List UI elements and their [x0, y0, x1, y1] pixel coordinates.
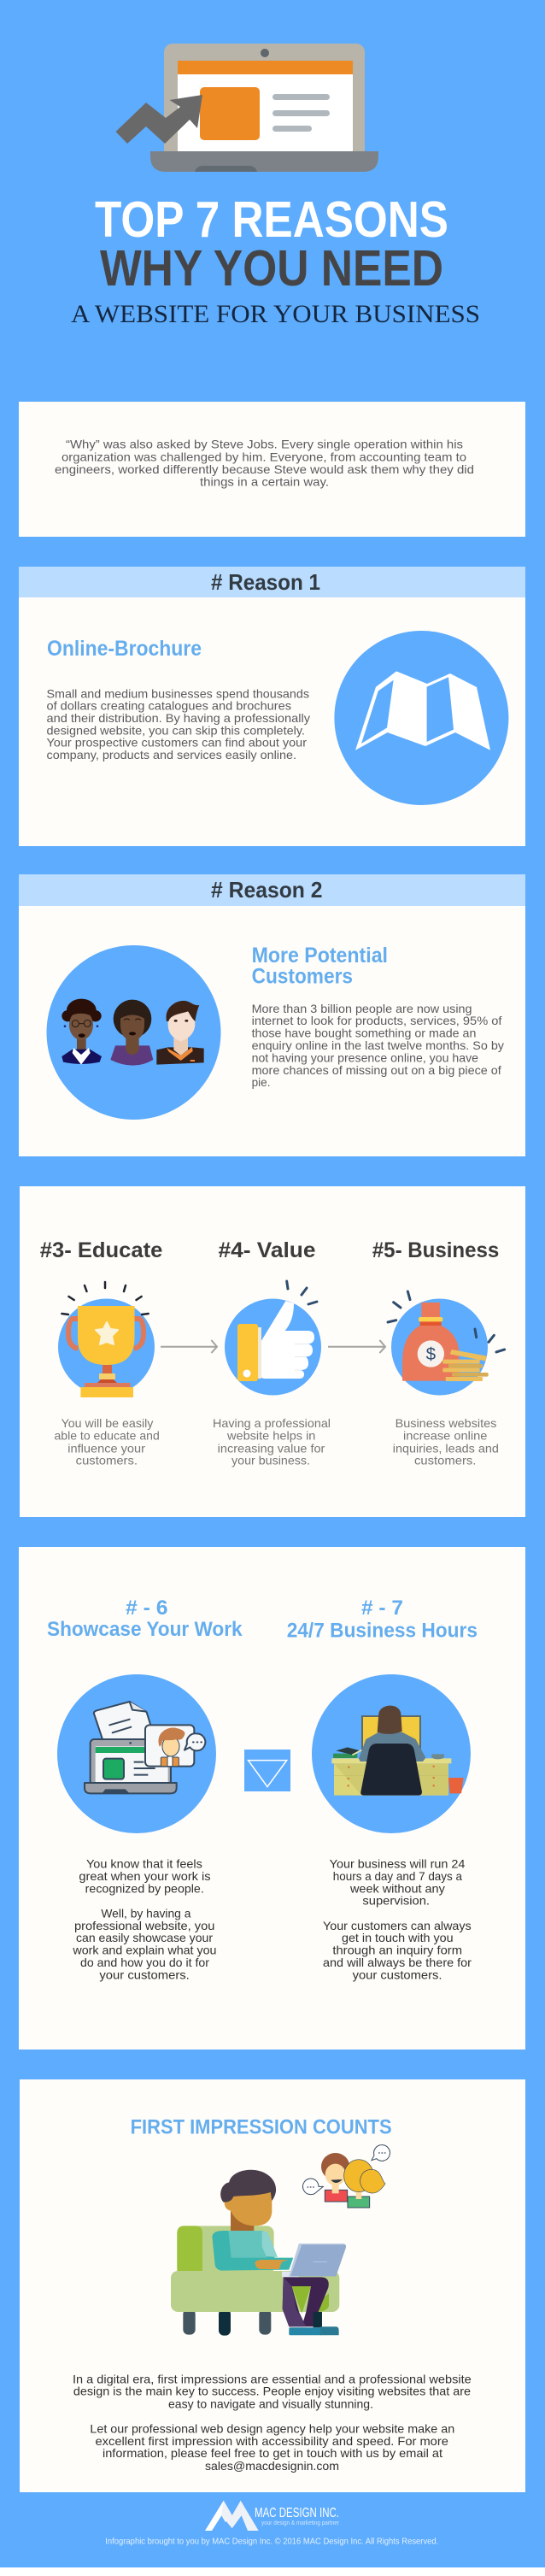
icon: laptop, document and profile — [57, 1674, 216, 1833]
panel: reason 2 — [19, 874, 525, 1156]
text: reason 6 body: your customers. — [99, 1967, 190, 1981]
heading: reason 1: # Reason 1 — [211, 569, 320, 595]
footer: logo: your design & marketing partner — [261, 2520, 340, 2526]
icon: person at desk — [312, 1674, 471, 1833]
heading: more potential customers: Customers — [252, 965, 353, 989]
text: reason 6 body: professional website, you — [74, 1919, 214, 1932]
text: more potential customers body: internet to look for products, services, 95% of — [252, 1014, 502, 1027]
text: educate body: You will be easily — [62, 1416, 153, 1430]
icon: down triangle box — [244, 1750, 290, 1791]
panel: first impression — [20, 2079, 525, 2492]
icon: trophy — [58, 1282, 155, 1397]
text: more potential customers body: pie. — [252, 1075, 270, 1089]
footer: logo — [205, 2501, 340, 2531]
icon: three people in circle — [46, 945, 220, 1120]
text: reason 7 body: your customers. — [353, 1967, 442, 1981]
heading: more potential customers: More Potential — [252, 944, 388, 967]
text: business body: increase online — [403, 1429, 488, 1443]
text: more potential customers body: more chances of missing out on a big piece of — [252, 1063, 501, 1077]
heading: reason 7: # - 7 — [361, 1597, 403, 1620]
icon: money bag and coins: $ — [426, 1344, 437, 1364]
panel: intro — [19, 402, 525, 537]
icon: laptop with growth arrow — [116, 44, 378, 172]
text: first impression body: sales@macdesignin.com — [205, 2459, 339, 2473]
title: WHY YOU NEED — [100, 239, 443, 297]
text: first impression body: Let our professional web design agency help your website make an — [90, 2421, 454, 2435]
panel: intro: things in a certain way. — [200, 475, 329, 489]
heading: reason 7 — [287, 1597, 478, 1643]
icon: folded map in circle — [334, 631, 508, 805]
title: TOP 7 REASONS — [95, 191, 448, 248]
footer: credit line: Infographic brought to you by MAC Design Inc. © 2016 MAC Design Inc. All Rights Reserved. — [105, 2537, 438, 2547]
heading: reason 6 — [47, 1597, 243, 1641]
panel: reasons 3 to 5 — [20, 1186, 525, 1517]
text: reason 7 body: and will always be there for — [323, 1956, 472, 1969]
text: educate body: influence your — [67, 1441, 145, 1455]
text: value body — [213, 1416, 331, 1467]
text: more potential customers body: More than 3 billion people are now using — [252, 1002, 472, 1015]
text: value body: Having a professional — [213, 1416, 331, 1430]
text: first impression body: excellent first impression with accessibility and speed. For more — [96, 2434, 448, 2448]
text: reason 7 body: Your customers can always — [323, 1919, 472, 1932]
text: reason 6 body: recognized by people. — [85, 1881, 204, 1895]
heading: reason 2: # Reason 2 — [211, 877, 323, 903]
text: reason 6 body: do and how you do it for — [80, 1956, 209, 1969]
title: A WEBSITE FOR YOUR BUSINESS — [71, 300, 480, 328]
text: reason 6 body: can easily showcase your — [76, 1931, 213, 1944]
heading: reason 7: 24/7 Business Hours — [287, 1619, 478, 1643]
text: business body — [393, 1416, 499, 1467]
text: educate body: customers. — [76, 1454, 138, 1467]
icon: two people talking — [303, 2145, 390, 2208]
text: reason 6 body: work and explain what you — [72, 1944, 217, 1957]
text: first impression body — [73, 2373, 472, 2473]
text: value body: website helps in — [226, 1429, 315, 1443]
text: more potential customers body — [252, 1002, 504, 1089]
text: reason 7 body: get in touch with you — [342, 1931, 454, 1944]
panel: intro: engineers, worked differently because Steve would ask them why they did — [55, 462, 474, 476]
footer: logo: MAC DESIGN INC. — [255, 2506, 339, 2520]
text: reason 7 body: week without any — [349, 1881, 445, 1895]
text: business body: Business websites — [396, 1416, 496, 1430]
panel: reason 1 — [19, 567, 525, 846]
text: business body: customers. — [414, 1454, 476, 1467]
text: more potential customers body: enquiry online in the last twelve months. So by — [252, 1038, 504, 1052]
text: online brochure body: and their distribution. By having a professionally — [46, 711, 310, 725]
text: online brochure body: of dollars creating catalogues and brochures — [46, 699, 291, 713]
text: educate body: able to educate and — [55, 1429, 160, 1443]
text: first impression body: In a digital era, first impressions are essential and a professional website — [73, 2373, 472, 2386]
text: first impression body: design is the main key to success. People enjoy visiting websites that are — [73, 2385, 471, 2398]
heading: first impression counts: FIRST IMPRESSION COUNTS — [131, 2116, 392, 2139]
panel: reasons 6 and 7 — [19, 1547, 525, 2050]
heading: reason 6: # - 6 — [126, 1597, 167, 1620]
text: online brochure body: Your prospective customers can find about your — [46, 736, 307, 750]
text: online brochure body: company, products and services easily online. — [46, 748, 296, 762]
text: reason 7 body: Your business will run 24 — [330, 1857, 466, 1871]
heading: reason 6: Showcase Your Work — [47, 1618, 243, 1641]
text: reason 7 body — [323, 1857, 472, 1981]
icon: money bag and coins — [388, 1291, 505, 1395]
text: value body: your business. — [231, 1454, 310, 1467]
text: educate body — [55, 1416, 160, 1467]
icon: person on armchair with laptop — [171, 2170, 346, 2336]
title — [71, 191, 480, 328]
text: online brochure body: Small and medium businesses spend thousands — [46, 686, 309, 700]
panel: intro: organization was challenged by him. Everyone, from accounting team to — [62, 450, 466, 463]
text: reason 7 body: through an inquiry form — [332, 1944, 462, 1957]
heading: more potential customers — [252, 944, 388, 989]
heading: value: #4- Value — [219, 1238, 316, 1262]
text: online brochure body — [46, 686, 310, 762]
heading: online brochure: Online-Brochure — [47, 637, 202, 661]
text: reason 7 body: supervision. — [362, 1894, 430, 1908]
heading: educate: #3- Educate — [40, 1238, 162, 1262]
text: value body: increasing value for — [218, 1441, 325, 1455]
text: reason 6 body: You know that it feels — [86, 1857, 202, 1871]
text: more potential customers body: those have bought something or made an — [252, 1026, 476, 1040]
icon: thumbs up — [225, 1281, 321, 1395]
text: reason 6 body — [72, 1857, 217, 1981]
text: first impression body: easy to navigate and visually stunning. — [168, 2397, 373, 2410]
text: business body: inquiries, leads and — [393, 1441, 499, 1455]
text: reason 7 body: hours a day and 7 days a — [333, 1869, 462, 1883]
text: first impression body: information, please feel free to get in touch with us by email at — [103, 2446, 442, 2460]
heading: business: #5- Business — [372, 1238, 499, 1262]
text: more potential customers body: not having your presence online, you have — [252, 1051, 478, 1065]
text: reason 6 body: great when your work is — [79, 1869, 211, 1883]
text: reason 6 body: Well, by having a — [101, 1906, 191, 1920]
arrow: educate to value — [161, 1340, 217, 1353]
panel: intro: “Why” was also asked by Steve Jobs. Every single operation within his — [66, 438, 463, 451]
arrow: value to business — [328, 1340, 385, 1353]
text: online brochure body: designed website, you can skip this completely. — [46, 723, 305, 737]
